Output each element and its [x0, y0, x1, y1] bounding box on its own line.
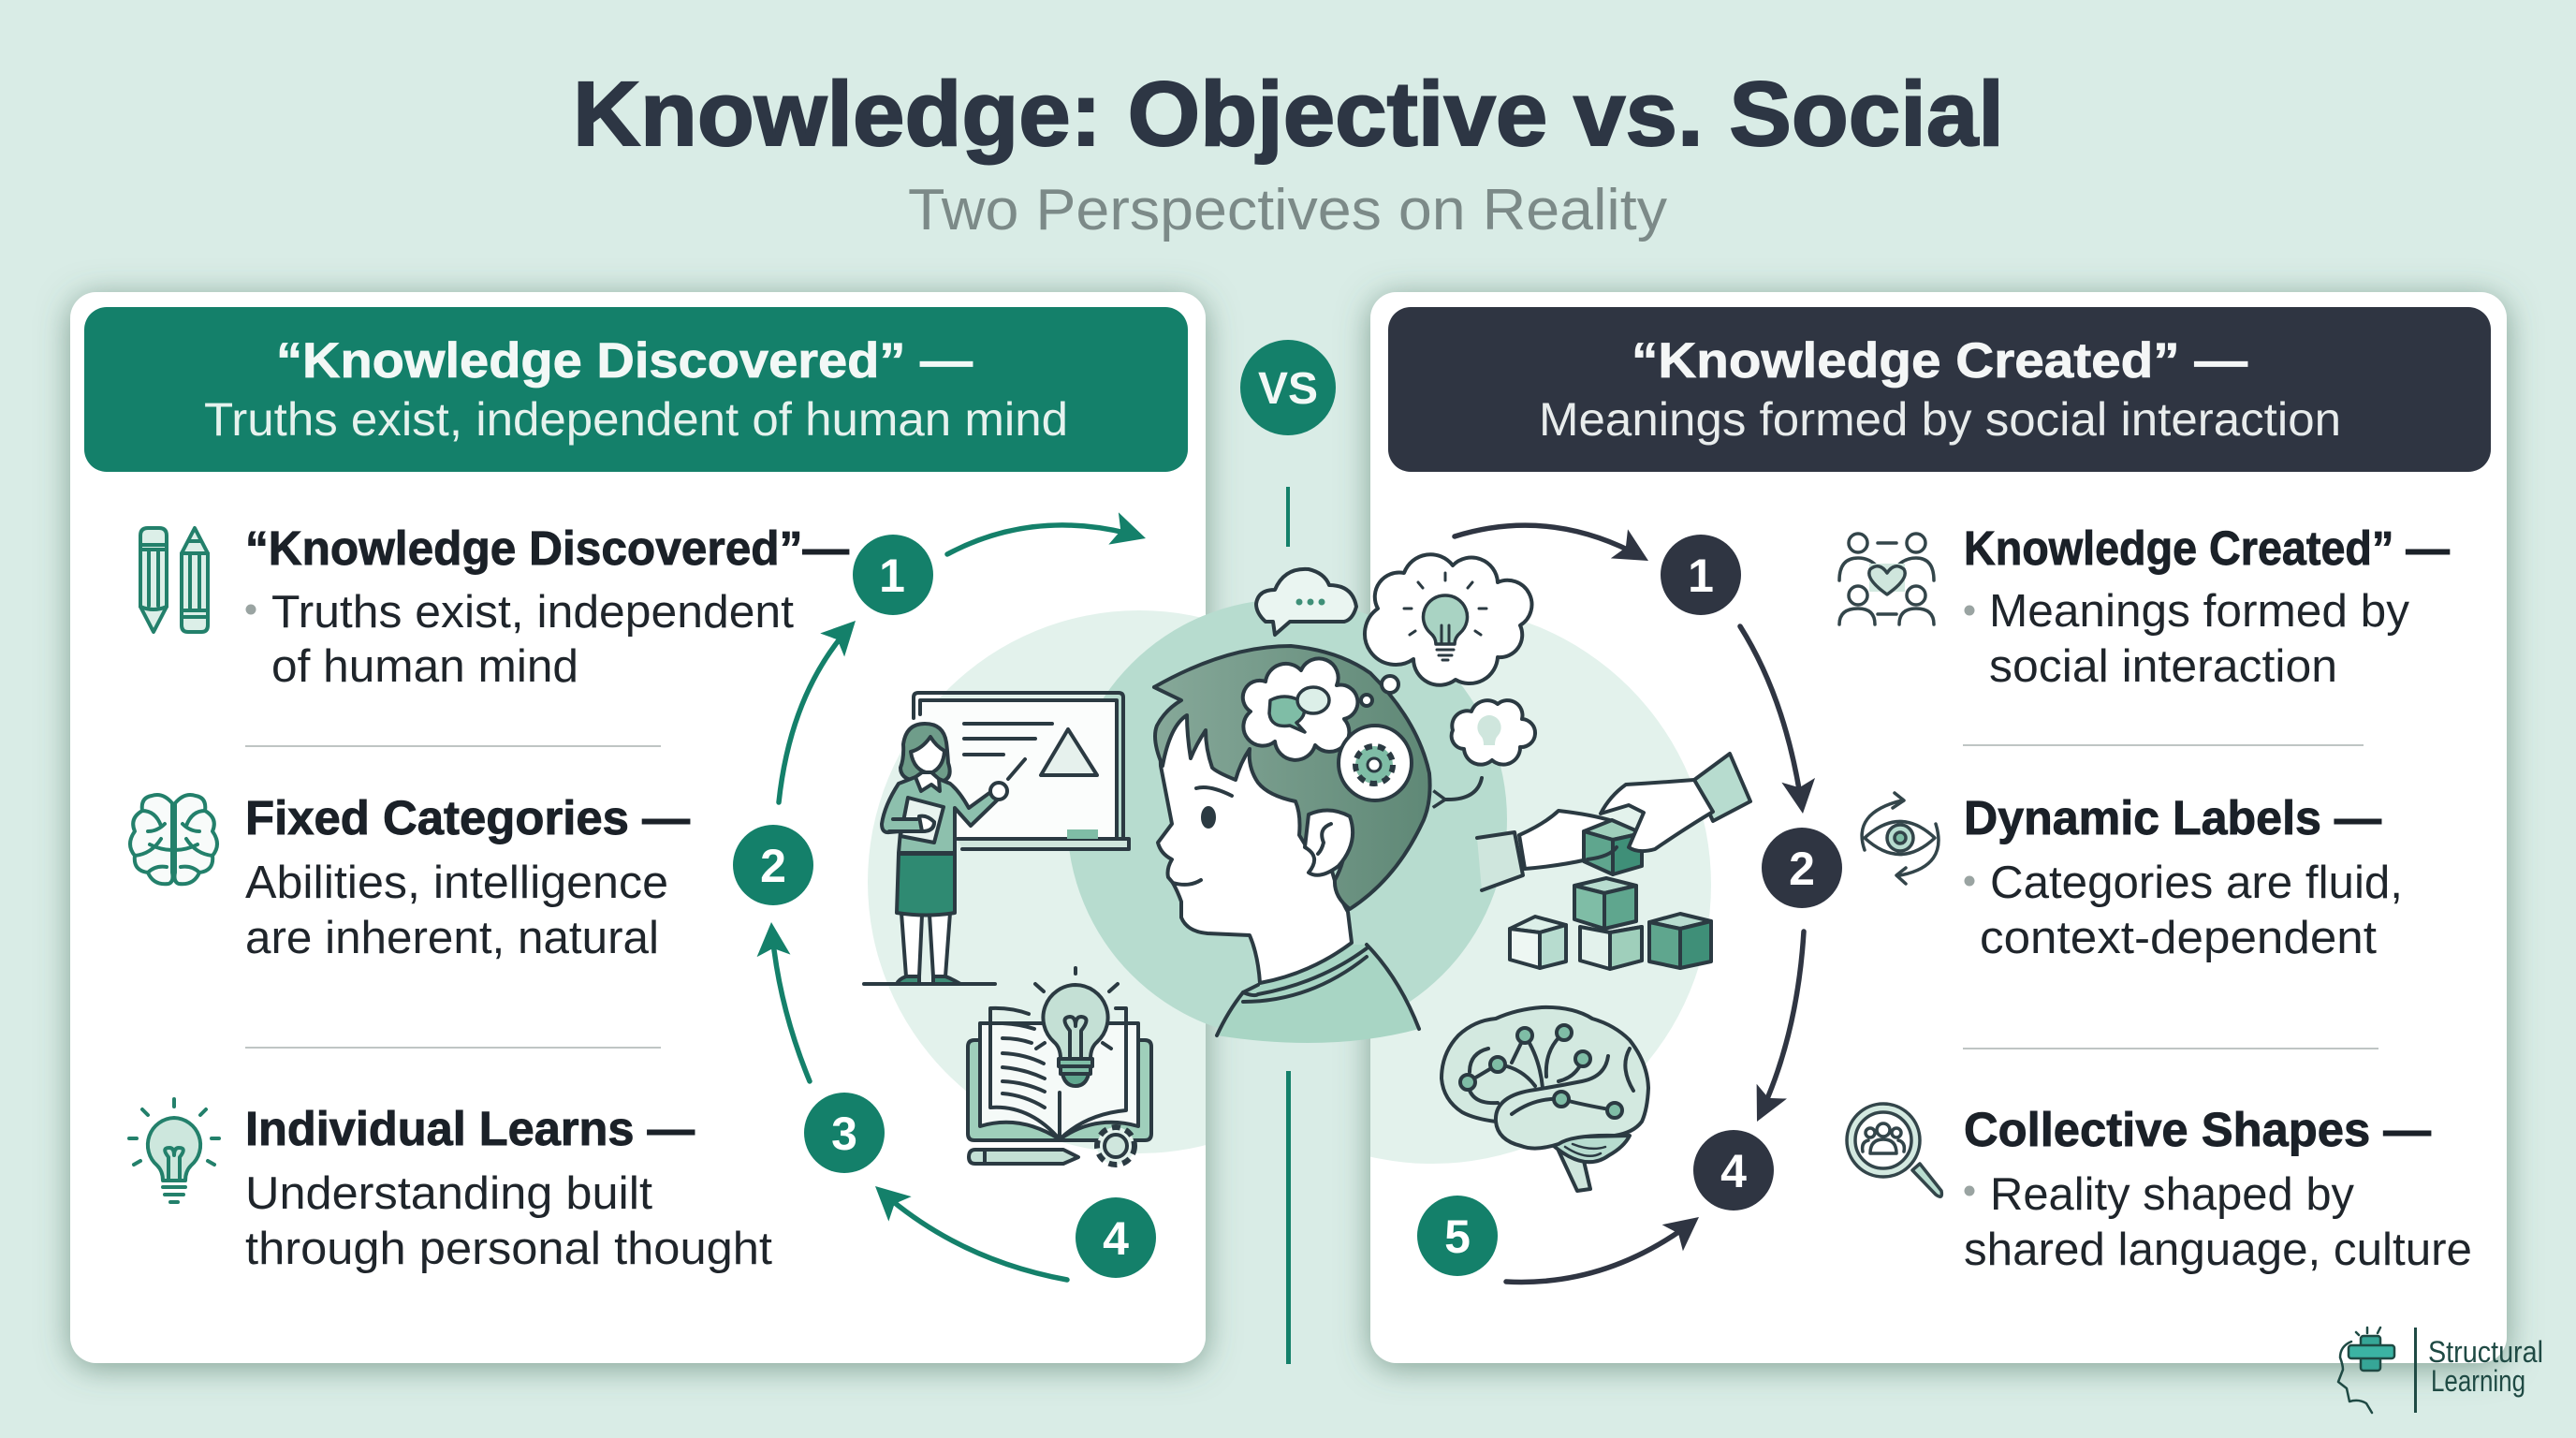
divider line upper [1286, 487, 1290, 547]
header: knowledge discovered [84, 307, 1188, 472]
header: knowledge created [1388, 307, 2491, 472]
collar [1243, 948, 1367, 995]
left item 2: fixed categories [130, 791, 690, 963]
cycle right: step 5 [1417, 1196, 1498, 1276]
icon: magnifier with people [1847, 1104, 1941, 1196]
illustration: hands and building blocks [1477, 754, 1750, 969]
heading: Dynamic Labels — [1964, 791, 2381, 844]
cycle right: step 5: 5 [1444, 1211, 1471, 1263]
subtitle: Two Perspectives on Reality [908, 178, 1667, 242]
left hand [1477, 811, 1616, 890]
body text: Abilities, intelligence [245, 858, 668, 908]
body text: Truths exist, independent [271, 587, 794, 638]
hair [1154, 646, 1430, 909]
vs badge [1240, 340, 1336, 435]
cycle left: step 2: 2 [760, 840, 786, 892]
header: knowledge created: Meanings formed by social interaction [1539, 393, 2341, 446]
right item 1: knowledge created: social interaction [1989, 641, 2337, 692]
neck and face [1154, 687, 1352, 983]
cycle right: step 2 [1762, 828, 1842, 908]
icon: eye with cycle arrows [1862, 793, 1939, 884]
cycle left: step 3 [804, 1093, 885, 1173]
thought cloud with bulb [1365, 554, 1531, 685]
whiteboard [914, 693, 1129, 849]
bullet [1964, 605, 1975, 616]
bullet [1964, 876, 1975, 886]
cycle left: step 1: 1 [879, 550, 905, 602]
logo: structural learning [2338, 1328, 2543, 1413]
heading: Individual Learns — [245, 1102, 695, 1155]
illustration: book with bulb and gear [968, 968, 1151, 1165]
heading: Knowledge Created” — [1964, 521, 2450, 575]
icon: light bulb [129, 1099, 219, 1202]
block left [1510, 917, 1566, 968]
cycle right: step 1 [1661, 535, 1741, 615]
heading: Fixed Categories — [245, 791, 690, 844]
right item 3: collective shapes [1847, 1103, 2472, 1275]
cycle left: step 4 [1076, 1197, 1156, 1278]
logo: structural learning: Learning [2431, 1364, 2525, 1398]
panel: left background [70, 292, 1206, 1363]
header: knowledge created: “Knowledge Created” — [1632, 333, 2247, 389]
held block [1584, 820, 1642, 874]
icon: pencils [140, 528, 208, 632]
logo mark [2338, 1328, 2394, 1413]
cycle left: step 1 [853, 535, 933, 615]
vs badge: VS [1258, 364, 1318, 414]
right item 3: collective shapes: shared language, culture [1964, 1225, 2472, 1275]
header: knowledge discovered: Truths exist, independent of human mind [204, 393, 1068, 446]
logo: structural learning: Structural [2428, 1335, 2543, 1369]
illustration: brain with network nodes [1442, 1007, 1648, 1191]
illustration: boy head with thoughts [1154, 646, 1430, 1043]
small return arrow [1445, 778, 1482, 800]
pale backdrop circle left [868, 610, 1206, 1153]
left item 2: fixed categories: are inherent, natural [245, 913, 659, 963]
cycle left: arrows [771, 525, 1146, 1280]
left item 1: knowledge discovered: of human mind [271, 641, 578, 692]
illustration: teacher at whiteboard [864, 693, 1129, 984]
right item 2: dynamic labels [1862, 791, 2403, 963]
speech bubble [1256, 569, 1356, 635]
ear [1305, 810, 1353, 875]
icon: brain [130, 795, 217, 884]
cycle left: step 3: 3 [831, 1108, 857, 1160]
cycle left: step 2 [733, 825, 813, 905]
body text: Reality shaped by [1990, 1169, 2354, 1220]
teacher figure [882, 724, 1007, 984]
heading: “Knowledge Discovered”— [245, 521, 849, 575]
left item 3: individual learns [129, 1099, 772, 1274]
brow eye mouth [1173, 787, 1232, 885]
thought bubble: gear [1339, 726, 1412, 800]
bullet [1964, 1185, 1975, 1196]
panel: right background [1370, 292, 2507, 1363]
pale backdrop circle right [1370, 622, 1711, 1164]
right hand [1588, 754, 1750, 859]
body text: Meanings formed by [1989, 586, 2409, 637]
left item 3: individual learns: through personal thought [245, 1224, 772, 1274]
faded thought cloud [1452, 700, 1535, 765]
cycle right: step 4: 4 [1720, 1145, 1747, 1197]
title: Knowledge: Objective vs. Social [573, 63, 2004, 165]
heading: Collective Shapes — [1964, 1103, 2431, 1156]
shirt [1217, 945, 1419, 1043]
header: knowledge discovered: “Knowledge Discovered” — [276, 333, 973, 389]
cycle right: step 2: 2 [1789, 843, 1815, 895]
bullet [245, 605, 256, 614]
body text: Categories are fluid, [1990, 858, 2403, 908]
cycle right: arrows [1455, 525, 1804, 1282]
cycle right: step 1: 1 [1688, 550, 1714, 602]
central backdrop circle [1067, 599, 1507, 1039]
right item 1: knowledge created [1839, 521, 2450, 692]
block middle upper [1574, 878, 1636, 929]
thought bubble: chat [1243, 658, 1357, 760]
body text: Understanding built [245, 1168, 652, 1219]
right item 2: dynamic labels: context-dependent [1980, 913, 2377, 963]
icon: connected people [1839, 534, 1934, 624]
cycle right: step 4 [1693, 1130, 1774, 1211]
left item 1: knowledge discovered [140, 521, 849, 692]
cycle left: step 4: 4 [1103, 1212, 1129, 1265]
divider line lower [1286, 1071, 1291, 1364]
block right [1649, 914, 1711, 968]
block middle lower [1580, 927, 1642, 969]
